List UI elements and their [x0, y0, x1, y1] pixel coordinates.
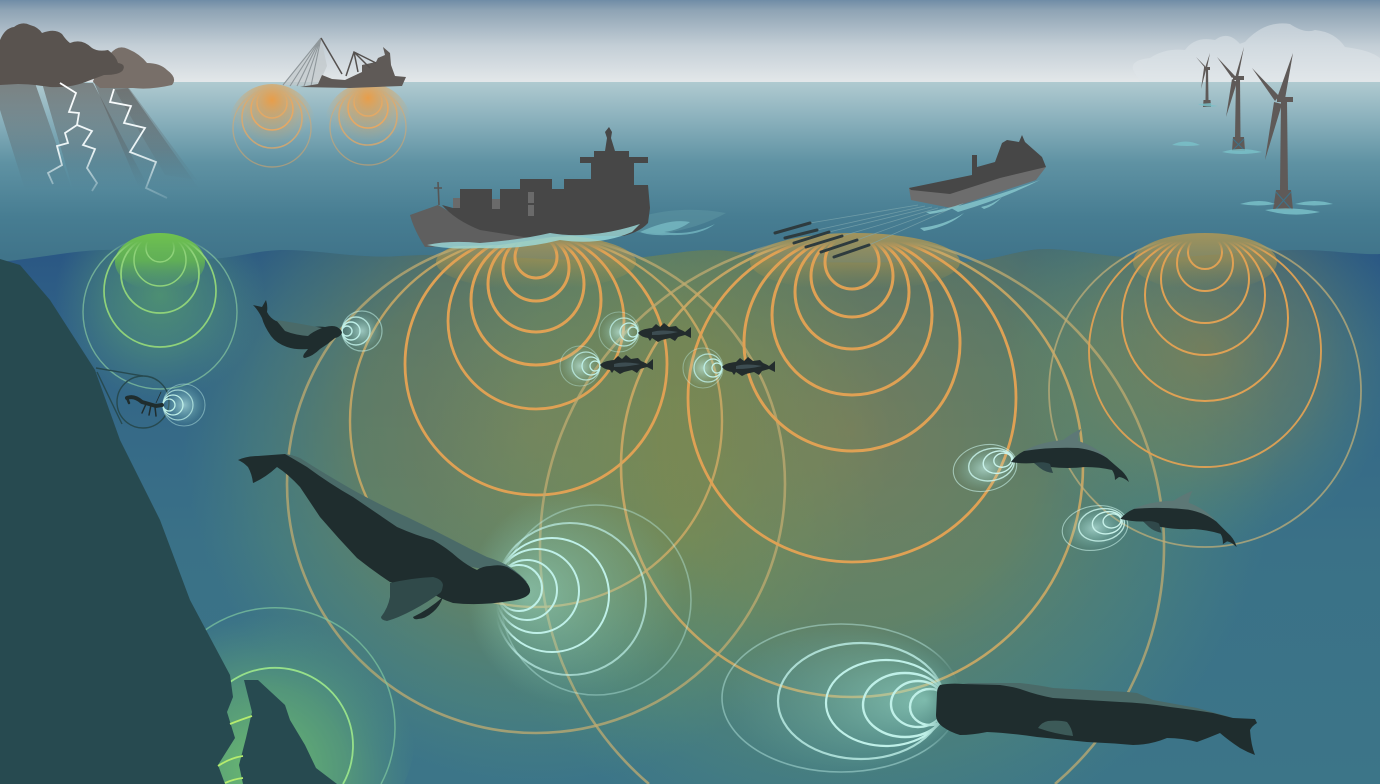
sound glow left: [228, 84, 316, 172]
sonar from dolphin 1: [949, 439, 1021, 497]
dolphin 1 flipper: [1034, 462, 1053, 473]
whale back: [285, 454, 527, 582]
sound glow right: [324, 83, 412, 171]
sea rock: [239, 680, 337, 784]
sound rings: survey vessel: [540, 234, 1164, 784]
turbine foundation lattice: [1233, 139, 1291, 209]
dolphin 2 body: [1119, 505, 1239, 547]
ship bow: [410, 205, 560, 247]
fish 2 side: [614, 362, 640, 367]
dolphin 2 back: [1134, 487, 1218, 522]
ship superstructure: [442, 127, 650, 238]
turbine middle: [1217, 47, 1245, 151]
wind turbines: [1172, 47, 1333, 215]
sonar from fish 2: [560, 346, 600, 386]
dolphin 1: [1011, 429, 1129, 482]
sound rings: container ship: [287, 233, 785, 733]
survey streamers: [775, 205, 950, 257]
sky: [0, 0, 1380, 83]
water domes at noise sources: [115, 233, 1277, 291]
seal: [253, 300, 342, 358]
sonar from lobster: [163, 384, 205, 426]
fish 3 side: [736, 364, 762, 369]
sea surface: [0, 82, 1380, 262]
survey vessel: [909, 135, 1046, 231]
fish 3: [722, 357, 775, 376]
underwater body: [0, 249, 1380, 784]
fishing vessel: [300, 47, 406, 88]
whale body: [238, 454, 530, 604]
fish 1: [638, 323, 691, 342]
rocky cliff: [0, 259, 235, 784]
crevice sound arcs: [218, 716, 252, 783]
storm: [0, 23, 200, 198]
front cloud: [0, 23, 124, 87]
turbine water wisps: [1172, 103, 1333, 215]
seal back: [276, 320, 322, 336]
vessel wake wisps: [920, 180, 1040, 231]
fish 1 side: [652, 330, 678, 335]
fishing net: [283, 38, 327, 86]
sonar from dolphin 2: [1059, 501, 1131, 555]
fish 2: [600, 355, 653, 374]
ship mast: [434, 182, 442, 205]
ship wake: [630, 210, 726, 234]
sound rings: lightning in water: [83, 234, 237, 389]
wake foam: [640, 221, 715, 235]
distant clouds: [1133, 23, 1380, 82]
vessel deck and superstructure: [909, 135, 1046, 194]
back cloud: [93, 47, 174, 89]
container side panels: [453, 192, 534, 216]
sonar from fish 1: [599, 312, 639, 352]
sperm whale: [936, 683, 1257, 755]
sound rings right: [330, 87, 406, 165]
turbine near: [1252, 53, 1293, 210]
sound rings: seafloor vent: [107, 567, 417, 784]
sonar rings from right whale: [494, 505, 691, 695]
container ship: [410, 127, 726, 249]
sonar glow from right whale: [467, 490, 683, 706]
right whale: [238, 454, 530, 621]
turbine far: [1196, 53, 1211, 107]
glow field: [72, 249, 1370, 784]
sonar from fish 3: [683, 348, 723, 388]
lightning bolts: [48, 83, 167, 198]
sonar rings from sperm whale: [722, 624, 960, 772]
dolphin 1 back: [1024, 429, 1107, 458]
sonar glow from sperm whale: [718, 624, 962, 776]
sound rings left: [233, 88, 311, 167]
whale flipper: [381, 577, 443, 621]
rain beams: [0, 80, 200, 190]
fishing vessel sound: [228, 38, 412, 172]
lobster callout lens: [96, 368, 169, 428]
sonar from seal: [342, 311, 382, 351]
dolphin 2: [1119, 486, 1240, 547]
sound rings: wind turbine: [1049, 235, 1361, 547]
sperm whale fin: [1038, 721, 1073, 736]
dolphin 2 flipper: [1143, 521, 1162, 533]
sperm whale back: [963, 683, 1230, 717]
sperm whale body: [936, 684, 1257, 755]
vessel hull: [909, 167, 1046, 208]
whale far flipper: [413, 597, 443, 619]
fishing vessel rigging: [321, 38, 376, 76]
lobster: [127, 392, 162, 416]
hull foam: [427, 224, 640, 249]
dolphin 1 body: [1011, 448, 1129, 482]
